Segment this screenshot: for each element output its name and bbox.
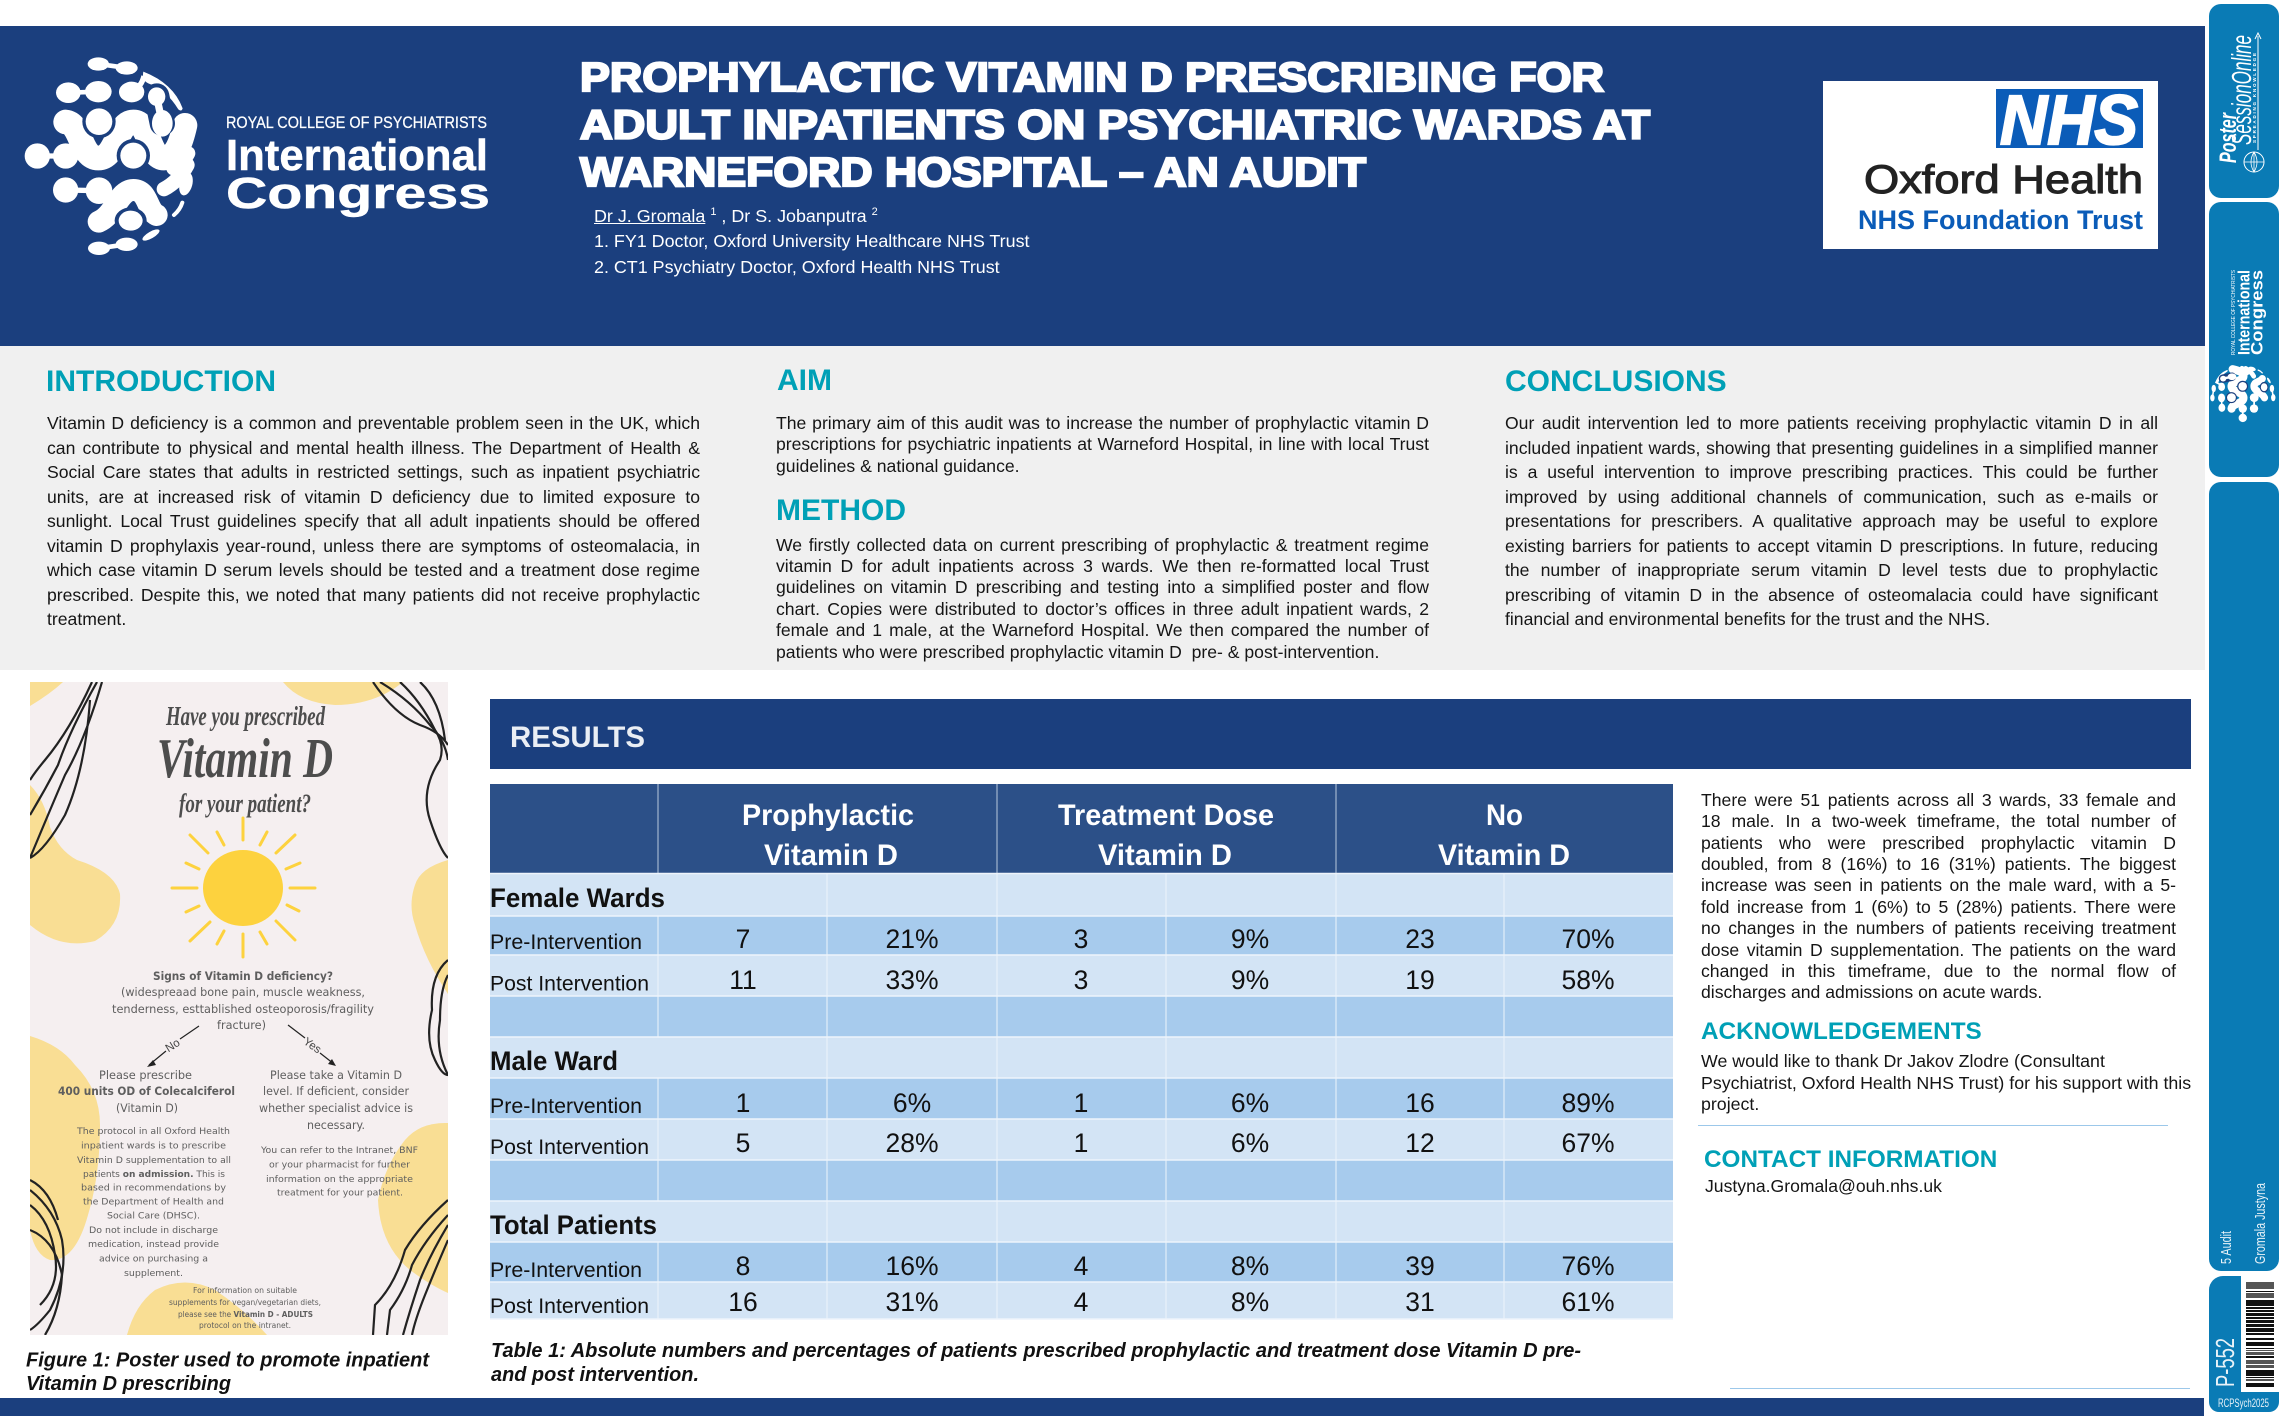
text: acknowledgements: We would like to thank Dr Jakov Zlodre (Consultant bbox=[1701, 1051, 2105, 1071]
table row labels: Total Patients bbox=[490, 1210, 657, 1240]
table values: 16 bbox=[728, 1287, 758, 1317]
logo: NHS Oxford Health bbox=[1823, 81, 2158, 249]
text: results summary: discharges and admissions on acute wards. bbox=[1701, 982, 2042, 1002]
text: method: chart. Copies were distributed to doctor’s offices in three adult inpatient wards, 2 bbox=[776, 599, 1429, 619]
authors and affiliations: 2. CT1 Psychiatry Doctor, Oxford Health NHS Trust bbox=[594, 257, 1000, 277]
table row labels: Post Intervention bbox=[490, 972, 649, 996]
caption: table 1 bbox=[491, 1340, 1581, 1386]
table row labels: Post Intervention bbox=[490, 1295, 649, 1318]
logo: congress side tab: ROYAL COLLEGE OF PSYCHIATRISTS bbox=[2231, 269, 2237, 355]
text: aim: prescriptions for psychiatric inpatients at Warneford Hospital, in line with local Trust bbox=[776, 434, 1429, 454]
poster headline: for your patient? bbox=[179, 789, 311, 818]
poster flowchart text: (widespreaad bone pain, muscle weakness, bbox=[121, 985, 365, 999]
logo: congress side tab bbox=[2210, 269, 2276, 422]
logo: Royal College of Psychiatrists International Congress: International bbox=[226, 131, 488, 180]
text: introduction: prescribed. Despite this, we noted that many patients did not receive prophylactic bbox=[47, 585, 700, 605]
poster flowchart text: tenderness, esttablished osteoporosis/fragility bbox=[112, 1002, 374, 1016]
table header: Vitamin D bbox=[764, 839, 898, 872]
arrow: no: No bbox=[164, 1037, 182, 1055]
table values: 7 bbox=[736, 924, 750, 954]
text: contact email: Justyna.Gromala@ouh.nhs.uk bbox=[1705, 1176, 1942, 1196]
text: method: guidelines on vitamin D prescribing and testing into a simplified poster and flow bbox=[776, 577, 1429, 597]
table row labels: Female Wards bbox=[490, 883, 665, 913]
poster flowchart text: please see the Vitamin D - ADULTS bbox=[178, 1310, 313, 1319]
poster flowchart text: The protocol in all Oxford Health bbox=[76, 1127, 230, 1137]
icon: sun bbox=[172, 818, 315, 957]
caption: figure 1: Vitamin D prescribing bbox=[26, 1372, 231, 1395]
text: poster number bbox=[2210, 1338, 2269, 1410]
text: conclusions bbox=[1505, 413, 2158, 629]
table header: Vitamin D bbox=[1438, 839, 1570, 872]
caption: table 1: and post intervention. bbox=[491, 1364, 699, 1386]
poster headline bbox=[157, 701, 333, 818]
heading: aim: AIM bbox=[777, 364, 832, 397]
logo: congress side tab: International bbox=[2234, 270, 2254, 355]
title: WARNEFORD HOSPITAL – AN AUDIT bbox=[580, 149, 1366, 195]
text: introduction bbox=[47, 413, 700, 629]
text: introduction: can contribute to physical and mental health illness. The Department of Health & bbox=[47, 438, 700, 458]
table row labels: Pre-Intervention bbox=[490, 1095, 642, 1118]
text: aim: The primary aim of this audit was to increase the number of prophylactic vitamin D bbox=[776, 412, 1429, 432]
banner bbox=[0, 26, 2205, 346]
heading: conclusions: CONCLUSIONS bbox=[1505, 364, 1727, 398]
caption: figure 1: Figure 1: Poster used to promote inpatient bbox=[26, 1348, 430, 1372]
text: conclusions: presentations for prescribers. A qualitative approach may be useful to explore bbox=[1505, 511, 2158, 531]
arrow: yes bbox=[288, 1025, 336, 1066]
text: conclusions: financial and environmental benefits for the trust and the NHS. bbox=[1505, 609, 1990, 629]
table values: 12 bbox=[1405, 1128, 1435, 1158]
logo: Royal College of Psychiatrists International Congress: ROYAL COLLEGE OF PSYCHIATRISTS bbox=[226, 114, 487, 132]
table values: 19 bbox=[1405, 965, 1435, 995]
table values: 1 bbox=[736, 1088, 750, 1118]
barcode bbox=[2241, 1276, 2279, 1392]
text: acknowledgements: Psychiatrist, Oxford Health NHS Trust) for his support with this bbox=[1701, 1073, 2191, 1093]
logo: NHS Oxford Health: Oxford Health bbox=[1864, 158, 2143, 202]
title: ADULT INPATIENTS ON PSYCHIATRIC WARDS AT bbox=[580, 102, 1650, 148]
poster flowchart text: or your pharmacist for further bbox=[269, 1160, 410, 1170]
table values: 4 bbox=[1074, 1287, 1088, 1317]
table values: 28% bbox=[885, 1128, 939, 1158]
panel: side tab poster session online bbox=[2209, 4, 2279, 198]
poster flowchart text: Signs of Vitamin D deficiency? bbox=[153, 969, 333, 983]
poster flowchart text: Please prescribe bbox=[99, 1068, 192, 1082]
poster headline: Have you prescribed bbox=[165, 701, 325, 731]
table values: 16% bbox=[885, 1251, 939, 1281]
poster flowchart text: treatment for your patient. bbox=[277, 1188, 403, 1198]
poster flowchart text: supplement. bbox=[124, 1269, 183, 1279]
poster flowchart text: For information on suitable bbox=[193, 1286, 297, 1295]
table values bbox=[728, 924, 1615, 1317]
table values: 1 bbox=[1074, 1088, 1088, 1118]
table values: 33% bbox=[885, 965, 939, 995]
heading: contact information: CONTACT INFORMATION bbox=[1704, 1146, 1997, 1173]
heading: acknowledgements: ACKNOWLEDGEMENTS bbox=[1701, 1018, 1982, 1045]
table values: 6% bbox=[1231, 1128, 1269, 1158]
text: poster number: P-552 bbox=[2210, 1338, 2240, 1387]
logo: NHS Oxford Health: NHS bbox=[2000, 81, 2138, 159]
text: conclusions: existing barriers for patients to accept vitamin D prescriptions. In future, reducing bbox=[1505, 536, 2158, 556]
caption: figure 1 bbox=[26, 1348, 430, 1395]
text: introduction: Social Care states that adults in restricted settings, such as inpatient psychiatric bbox=[47, 462, 700, 482]
text: audit category and author: Gromala Justyna bbox=[2253, 1182, 2269, 1264]
table values: 5 bbox=[736, 1128, 750, 1158]
heading: results bar bbox=[490, 699, 2191, 769]
poster flowchart text: Do not include in discharge bbox=[89, 1226, 218, 1236]
text: results summary: increase was seen in patients on the male ward, with a 5- bbox=[1701, 875, 2176, 895]
table values: 4 bbox=[1074, 1251, 1088, 1281]
text: results summary: doubled, from 8 (16%) to 16 (31%) patients. The biggest bbox=[1701, 854, 2176, 874]
arrow: yes: Yes bbox=[301, 1036, 323, 1056]
table values: 39 bbox=[1405, 1251, 1435, 1281]
poster flowchart text: supplements for vegan/vegetarian diets, bbox=[169, 1298, 321, 1307]
table row labels: Male Ward bbox=[490, 1046, 618, 1076]
poster flowchart text: medication, instead provide bbox=[88, 1240, 219, 1250]
text: introduction: vitamin D prophylaxis year-round, unless there are symptoms of osteomalacia, in bbox=[47, 536, 700, 556]
poster flowchart text: advice on purchasing a bbox=[99, 1254, 208, 1264]
poster flowchart text: You can refer to the Intranet, BNF bbox=[260, 1146, 418, 1156]
text: conclusions: Our audit intervention led to more patients receiving prophylactic vitamin D in all bbox=[1505, 413, 2158, 433]
panel: grey text band bbox=[0, 346, 2205, 670]
authors and affiliations: 1. FY1 Doctor, Oxford University Healthcare NHS Trust bbox=[594, 231, 1029, 251]
table row labels bbox=[490, 883, 665, 1318]
footer bar bbox=[0, 1398, 2204, 1416]
table row labels: Pre-Intervention bbox=[490, 931, 642, 954]
poster flowchart text: (Vitamin D) bbox=[116, 1101, 178, 1115]
table values: 11 bbox=[729, 965, 757, 995]
table values: 8% bbox=[1231, 1287, 1269, 1317]
table values: 21% bbox=[885, 924, 939, 954]
table values: 61% bbox=[1561, 1287, 1615, 1317]
heading: introduction: INTRODUCTION bbox=[46, 365, 276, 398]
poster flowchart text: inpatient wards is to prescribe bbox=[81, 1142, 226, 1152]
table values: 3 bbox=[1074, 965, 1088, 995]
poster flowchart text: necessary. bbox=[307, 1118, 365, 1132]
table values: 31% bbox=[885, 1287, 939, 1317]
table values: 23 bbox=[1405, 924, 1435, 954]
text: method: patients who were prescribed prophylactic vitamin D pre- & post-intervention. bbox=[776, 642, 1379, 662]
text: audit category and author: 5 Audit bbox=[2219, 1231, 2235, 1264]
table values: 8 bbox=[736, 1251, 750, 1281]
text: conclusions: prescribing of vitamin D in the absence of osteomalacia could have significant bbox=[1505, 585, 2158, 605]
title: PROPHYLACTIC VITAMIN D PRESCRIBING FOR bbox=[580, 54, 1604, 100]
text: audit category and author bbox=[2219, 1182, 2269, 1264]
poster flowchart text: level. If deficient, consider bbox=[263, 1084, 409, 1098]
text: conclusions: included inpatient wards, showing that presenting guidelines in a simplified manner bbox=[1505, 438, 2158, 458]
poster flowchart text: whether specialist advice is bbox=[259, 1101, 413, 1115]
table values: 58% bbox=[1561, 965, 1615, 995]
table values: 3 bbox=[1074, 924, 1088, 954]
text: results summary: no changes in the numbers of patients receiving treatment bbox=[1701, 918, 2176, 938]
text: results summary bbox=[1701, 790, 2176, 1002]
text: method: vitamin D for adult inpatients across 3 wards. We then re-formatted local Trust bbox=[776, 556, 1429, 576]
authors and affiliations bbox=[594, 206, 1030, 277]
logo: poster session online: SPREADING KNOWLEDGE bbox=[2252, 53, 2257, 143]
logo: poster session online bbox=[2215, 32, 2264, 172]
poster flowchart text: Social Care (DHSC). bbox=[107, 1212, 200, 1222]
text: results summary: fold increase from 1 (6%) to 5 (28%) patients. There were bbox=[1701, 897, 2176, 917]
text: introduction: sunlight. Local Trust guidelines specify that all adult inpatients should be offered bbox=[47, 511, 700, 531]
arrow: no bbox=[147, 1026, 199, 1067]
table values: 67% bbox=[1561, 1128, 1615, 1158]
table values: 16 bbox=[1405, 1088, 1435, 1118]
poster flowchart text: the Department of Health and bbox=[83, 1198, 224, 1208]
logo: congress side tab: Congress bbox=[2248, 270, 2266, 355]
text: acknowledgements bbox=[1701, 1051, 2191, 1114]
text: method: female and 1 male, at the Warneford Hospital. We then compared the number of bbox=[776, 620, 1429, 640]
table values: 76% bbox=[1561, 1251, 1615, 1281]
text: acknowledgements: project. bbox=[1701, 1094, 1759, 1114]
heading: method: METHOD bbox=[776, 494, 906, 527]
panel: side tab congress bbox=[2209, 202, 2279, 477]
table header bbox=[490, 784, 1673, 873]
footer rule bbox=[1730, 1388, 2190, 1389]
table header: Treatment Dose bbox=[1058, 799, 1274, 832]
text: results summary: There were 51 patients across all 3 wards, 33 female and bbox=[1701, 790, 2176, 810]
text: conclusions: is a useful intervention to improve prescribing practices. This could be further bbox=[1505, 462, 2158, 482]
text: method: We firstly collected data on current prescribing of prophylactic & treatment regime bbox=[776, 534, 1429, 554]
poster flowchart text: based in recommendations by bbox=[81, 1184, 227, 1194]
table: vitamin D results bbox=[490, 784, 1673, 1320]
table row labels: Post Intervention bbox=[490, 1136, 649, 1159]
panel: side tab author details bbox=[2209, 482, 2279, 1271]
poster flowchart text: protocol on the intranet. bbox=[199, 1321, 291, 1330]
text: introduction: Vitamin D deficiency is a common and preventable problem seen in the UK, which bbox=[47, 413, 700, 433]
table values: 89% bbox=[1561, 1088, 1615, 1118]
poster flowchart text: Please take a Vitamin D bbox=[270, 1068, 402, 1082]
panel: side tab poster number bbox=[2209, 1276, 2279, 1412]
poster flowchart text: information on the appropriate bbox=[266, 1175, 413, 1185]
text: results summary: 18 male. In a two-week timeframe, the total number of bbox=[1701, 811, 2176, 831]
table header: Prophylactic bbox=[742, 799, 914, 832]
table values: 8% bbox=[1231, 1251, 1269, 1281]
poster flowchart text: patients on admission. This is bbox=[83, 1170, 225, 1180]
text: results summary: changed in this timeframe, due to the normal flow of bbox=[1701, 961, 2176, 981]
heading: results bar: RESULTS bbox=[510, 721, 645, 754]
table values: 9% bbox=[1231, 924, 1269, 954]
text: method bbox=[776, 534, 1430, 662]
table row labels: Pre-Intervention bbox=[490, 1259, 642, 1282]
logo: Royal College of Psychiatrists International Congress: Congress bbox=[226, 169, 490, 218]
poster flowchart text: fracture) bbox=[217, 1018, 266, 1032]
poster flowchart text bbox=[58, 969, 418, 1330]
authors and affiliations: Dr J. Gromala 1 , Dr S. Jobanputra 2 bbox=[594, 206, 878, 226]
logo: NHS Oxford Health: NHS Foundation Trust bbox=[1858, 205, 2143, 235]
text: introduction: which case vitamin D serum levels should be tested and a treatment dose regime bbox=[47, 560, 700, 580]
title bbox=[578, 54, 1651, 195]
table values: 6% bbox=[1231, 1088, 1269, 1118]
poster headline: Vitamin D bbox=[157, 728, 333, 790]
figure: vitamin D poster bbox=[30, 682, 448, 1335]
table values: 70% bbox=[1561, 924, 1615, 954]
table header: Vitamin D bbox=[1098, 839, 1232, 872]
table rows bbox=[490, 873, 1673, 1319]
poster flowchart text: Vitamin D supplementation to all bbox=[77, 1156, 231, 1166]
caption: table 1: Table 1: Absolute numbers and percentages of patients prescribed prophylactic and treatment dose Vitamin D pre- bbox=[491, 1340, 1581, 1362]
text: results summary: patients who were prescribed prophylactic vitamin D bbox=[1701, 833, 2176, 853]
text: conclusions: the number of inappropriate serum vitamin D level tests due to prophylactic bbox=[1505, 560, 2158, 580]
logo: poster session online: Poster bbox=[2215, 112, 2242, 163]
text: conclusions: improved by using additional channels of communication, such as e-mails or bbox=[1505, 487, 2158, 507]
text: introduction: treatment. bbox=[47, 609, 126, 629]
table values: 1 bbox=[1074, 1128, 1088, 1158]
table values: 31 bbox=[1405, 1287, 1435, 1317]
text: introduction: units, are at increased risk of vitamin D deficiency due to limited exposure to bbox=[47, 487, 700, 507]
divider bbox=[1698, 1125, 2168, 1126]
logo: Royal College of Psychiatrists International Congress bbox=[24, 57, 490, 255]
table header: No bbox=[1486, 799, 1523, 832]
text: results summary: dose vitamin D supplementation. The patients on the ward bbox=[1701, 940, 2176, 960]
text: aim: guidelines & national guidance. bbox=[776, 456, 1020, 476]
text: aim bbox=[776, 412, 1429, 476]
table values: 6% bbox=[893, 1088, 931, 1118]
poster flowchart text: 400 units OD of Colecalciferol bbox=[58, 1084, 235, 1098]
table values: 9% bbox=[1231, 965, 1269, 995]
